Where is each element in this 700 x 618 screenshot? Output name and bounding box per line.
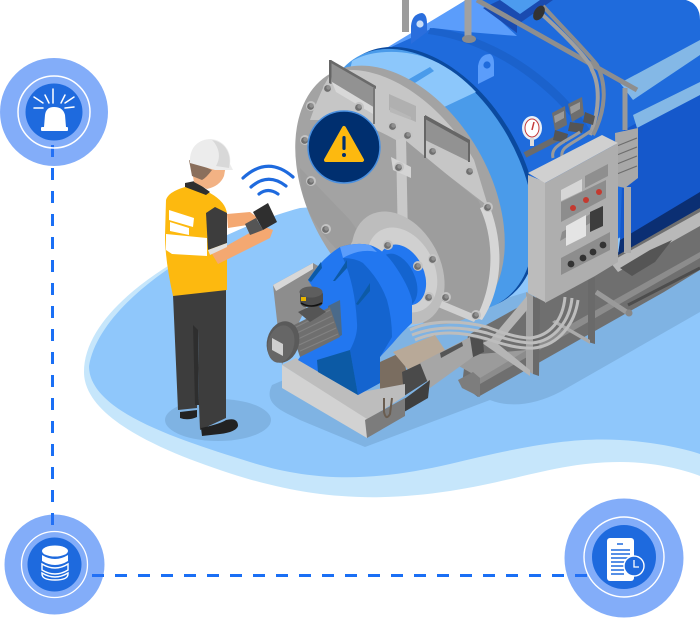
icon: alarm beacon bbox=[0, 58, 108, 166]
gearbox motor bbox=[262, 286, 342, 366]
wifi signal bbox=[243, 166, 293, 194]
dashed connector vertical bbox=[51, 145, 54, 530]
dashed connector horizontal bbox=[92, 574, 590, 577]
housing ribs bbox=[308, 260, 370, 305]
hinge plates bbox=[329, 60, 470, 162]
vest bbox=[165, 181, 227, 296]
machine shadow on floor bbox=[270, 240, 700, 447]
floor platform bbox=[84, 180, 700, 497]
icon: scheduled report bbox=[564, 498, 684, 618]
blue gear housing bbox=[298, 244, 412, 395]
strut to flange bbox=[438, 300, 478, 322]
control panel bbox=[482, 135, 618, 376]
panel label plates bbox=[561, 179, 582, 201]
top mount bbox=[483, 0, 553, 33]
lifting eyes bbox=[411, 13, 494, 84]
bolts bbox=[300, 83, 493, 320]
arms bbox=[206, 207, 273, 264]
front ring of boiler bbox=[278, 10, 582, 348]
piping and gauges bbox=[402, 0, 638, 253]
worker bbox=[165, 139, 277, 441]
cable bundle bbox=[410, 297, 578, 348]
tablet bbox=[245, 203, 277, 235]
flange bbox=[333, 195, 463, 341]
rail bracket rod bbox=[596, 268, 700, 316]
pressure gauge bbox=[522, 116, 542, 146]
boiler body bbox=[378, 0, 700, 270]
warning badge bbox=[308, 111, 380, 183]
transmitters bbox=[552, 97, 595, 143]
legs bbox=[173, 288, 238, 436]
icon: database bbox=[4, 514, 104, 614]
head and helmet bbox=[189, 139, 233, 189]
digital meter bbox=[566, 215, 586, 246]
panel legs bbox=[482, 277, 595, 376]
motor base block bbox=[273, 263, 405, 438]
rail base bbox=[457, 205, 700, 397]
boiler end plate bbox=[252, 29, 548, 361]
junction box bbox=[615, 128, 638, 188]
coupling and drive base bbox=[380, 335, 484, 412]
light stripes bbox=[620, 40, 700, 128]
